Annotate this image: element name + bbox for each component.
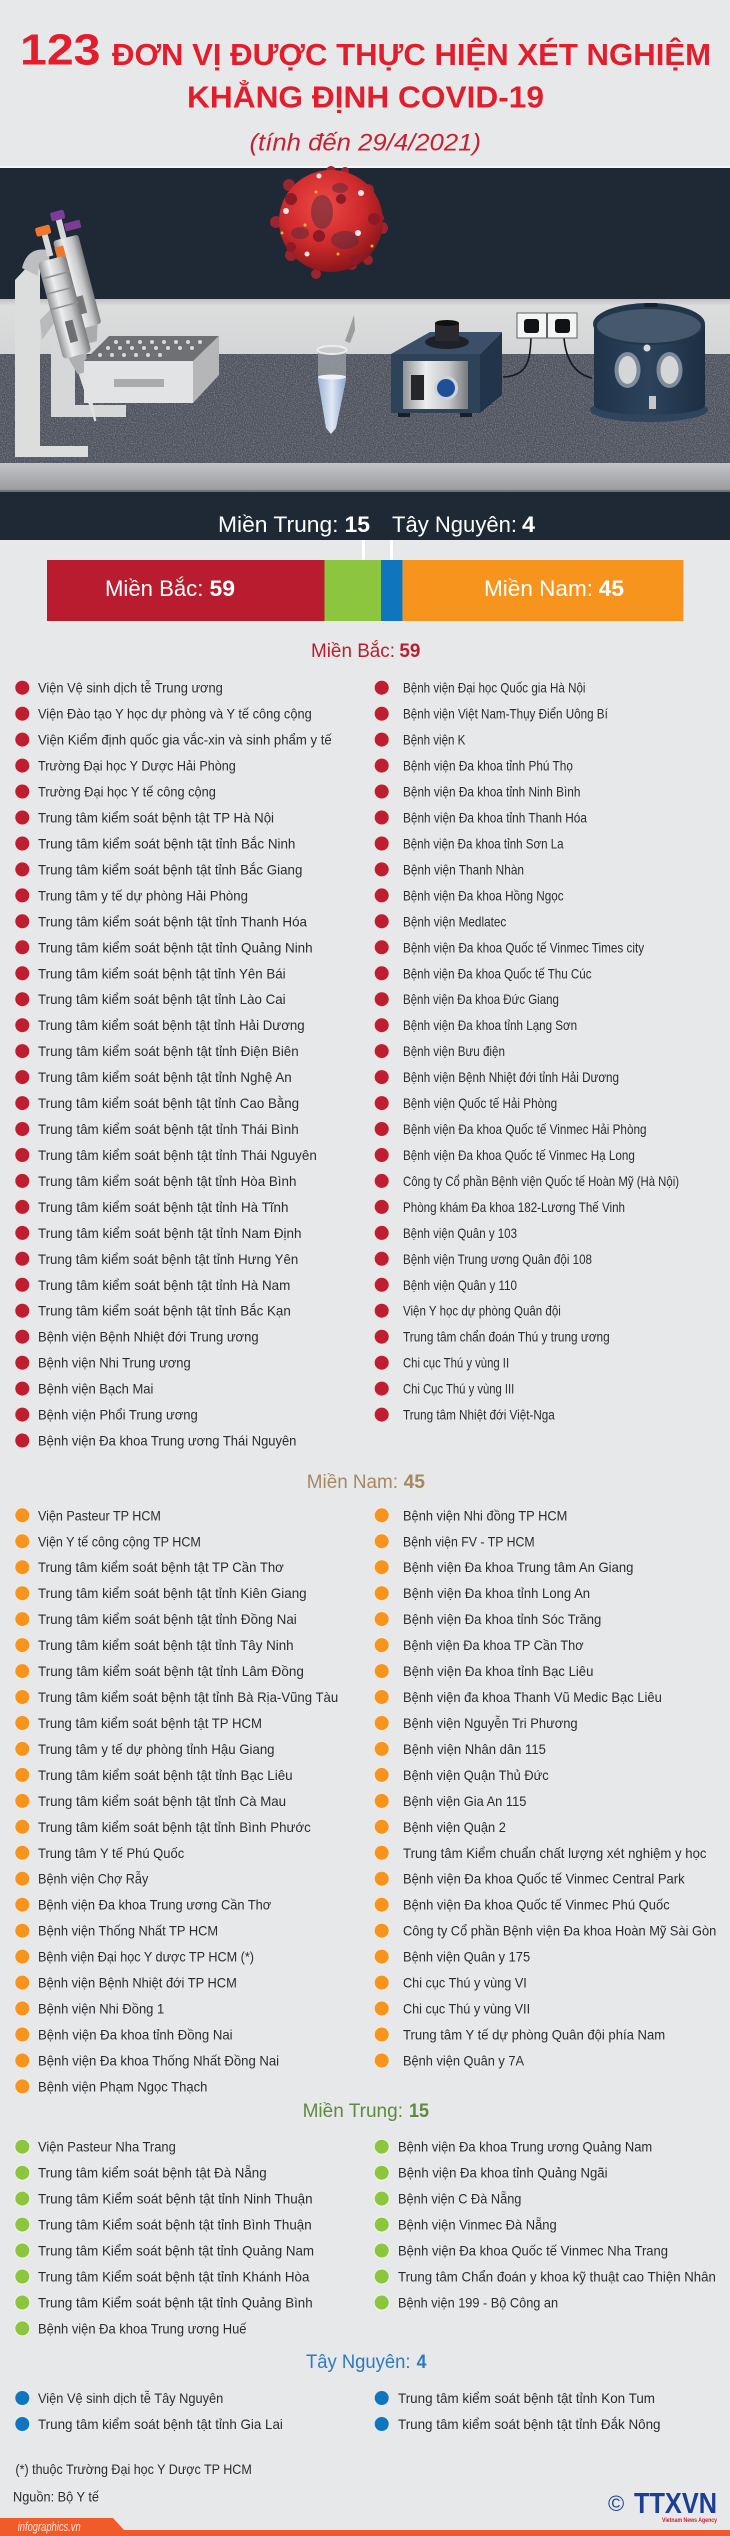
list: Miền Bắc left column: Bệnh viện Phổi Trung ương xyxy=(38,1407,198,1423)
icon: front pipette xyxy=(29,222,109,425)
logo: TTXVN: Vietnam News Agency xyxy=(662,2518,718,2524)
list: Miền Bắc left column: Trung tâm kiểm soát bệnh tật TP Hà Nội xyxy=(38,810,274,826)
list: Miền Trung left column: Trung tâm Kiểm soát bệnh tật tỉnh Quảng Nam xyxy=(38,2242,314,2258)
list: Miền Bắc left column: Trung tâm kiểm soát bệnh tật tỉnh Hưng Yên xyxy=(38,1251,298,1267)
list: Miền Nam right column: Bệnh viện Đa khoa tỉnh Bạc Liêu xyxy=(403,1663,593,1679)
list: Miền Bắc left column: Trung tâm kiểm soát bệnh tật tỉnh Yên Bái xyxy=(38,965,286,981)
list: Tây Nguyên left column: Viện Vệ sinh dịch tễ Tây Nguyên xyxy=(38,2390,223,2406)
heading: Miền Trung: Miền Trung: xyxy=(303,2101,403,2122)
label: central and highland counts: 15 xyxy=(344,512,370,537)
list: Miền Nam left column: Viện Pasteur TP HCM xyxy=(38,1507,161,1523)
list: Miền Nam right column: Bệnh viện Nhân dân 115 xyxy=(403,1741,546,1757)
list: Miền Nam left column: Bệnh viện Đa khoa Trung ương Cần Thơ xyxy=(38,1897,271,1913)
logo: TTXVN: TTXVN xyxy=(634,2488,717,2520)
list: Miền Nam left column xyxy=(15,1507,338,2094)
list: Miền Trung left column: Trung tâm Kiểm soát bệnh tật tỉnh Ninh Thuận xyxy=(38,2191,313,2207)
list: Miền Bắc right column: Bệnh viện Quân y 103 xyxy=(403,1225,517,1241)
list: Miền Bắc right column: Bệnh viện Đa khoa Quốc tế Vinmec Times city xyxy=(403,939,644,955)
list: Miền Nam right column xyxy=(374,1507,716,2068)
icon: vortex mixer xyxy=(391,320,502,417)
list: Miền Bắc left column xyxy=(15,680,332,1448)
list: Miền Bắc right column: Bệnh viện Bệnh Nhiệt đới tỉnh Hải Dương xyxy=(403,1069,619,1085)
list: Miền Nam right column: Chi cục Thú y vùng VI xyxy=(403,1975,527,1991)
list: Tây Nguyên right column: Trung tâm kiểm soát bệnh tật tỉnh Đắk Nông xyxy=(398,2416,660,2432)
source: Nguồn: Bộ Y tế xyxy=(13,2488,99,2504)
illustration: laboratory scene xyxy=(0,166,730,540)
footnote: (*) thuộc Trường Đại học Y Dược TP HCM xyxy=(15,2461,252,2477)
list: Miền Nam right column: Bệnh viện Đa khoa tỉnh Sóc Trăng xyxy=(403,1611,601,1627)
logo: TTXVN xyxy=(608,2488,718,2524)
list: Miền Bắc right column: Bệnh viện K xyxy=(403,732,466,748)
list: Miền Bắc left column: Trung tâm kiểm soát bệnh tật tỉnh Quảng Ninh xyxy=(38,939,313,955)
list: Miền Bắc left column: Trung tâm kiểm soát bệnh tật tỉnh Lào Cai xyxy=(38,991,286,1007)
list: Miền Bắc left column: Bệnh viện Bạch Mai xyxy=(38,1381,153,1397)
list: Miền Bắc right column: Bệnh viện Đa khoa tỉnh Phú Thọ xyxy=(403,758,573,774)
list: Miền Bắc right column: Bệnh viện Quân y 110 xyxy=(403,1277,517,1293)
label: central and highland counts: Miền Trung: xyxy=(218,512,338,537)
list: Miền Trung right column: Bệnh viện Đa khoa Quốc tế Vinmec Nha Trang xyxy=(398,2242,668,2258)
list: Miền Nam right column: Bệnh viện FV - TP HCM xyxy=(403,1533,535,1549)
list: Miền Bắc left column: Trung tâm y tế dự phòng Hải Phòng xyxy=(38,887,248,903)
footer bar: infographics.vn xyxy=(0,2518,730,2536)
list: Miền Nam right column: Bệnh viện Quận Thủ Đức xyxy=(403,1767,549,1783)
stacked bar chart: units by region: 59 xyxy=(210,576,235,601)
list: Miền Trung right column: Trung tâm Chẩn đoán y khoa kỹ thuật cao Thiện Nhân xyxy=(398,2268,716,2284)
list: Miền Nam left column: Trung tâm kiểm soát bệnh tật tỉnh Bạc Liêu xyxy=(38,1767,293,1783)
title: ĐƠN VỊ ĐƯỢC THỰC HIỆN XÉT NGHIỆM xyxy=(112,36,711,72)
list: Miền Bắc right column: Bệnh viện Quốc tế Hải Phòng xyxy=(403,1095,557,1111)
list: Miền Bắc left column: Trung tâm kiểm soát bệnh tật tỉnh Thái Bình xyxy=(38,1121,299,1137)
list: Miền Bắc left column: Bệnh viện Đa khoa Trung ương Thái Nguyên xyxy=(38,1432,296,1448)
list: Miền Nam right column: Bệnh viện Quận 2 xyxy=(403,1819,506,1835)
list: Miền Trung left column: Trung tâm kiểm soát bệnh tật Đà Nẵng xyxy=(38,2165,267,2181)
list: Miền Trung right column: Bệnh viện C Đà Nẵng xyxy=(398,2191,521,2207)
list: Miền Nam right column: Trung tâm Y tế dự phòng Quân đội phía Nam xyxy=(403,2026,665,2042)
list: Miền Bắc right column: Bệnh viện Đa khoa Quốc tế Vinmec Hải Phòng xyxy=(403,1121,646,1137)
list: Miền Bắc right column: Bệnh viện Thanh Nhàn xyxy=(403,861,524,877)
list: Miền Bắc right column: Bệnh viện Đa khoa Quốc tế Thu Cúc xyxy=(403,965,592,981)
list: Miền Nam left column: Trung tâm kiểm soát bệnh tật TP Cần Thơ xyxy=(38,1559,284,1575)
list: Miền Nam left column: Bệnh viện Chợ Rẫy xyxy=(38,1871,148,1887)
list: Miền Bắc right column: Bệnh viện Đại học Quốc gia Hà Nội xyxy=(403,680,586,696)
subtitle: date: (tính đến 29/4/2021) xyxy=(250,130,481,156)
list: Miền Trung right column: Bệnh viện Đa khoa Trung ương Quảng Nam xyxy=(398,2139,652,2155)
list: Miền Trung right column: Bệnh viện Vinmec Đà Nẵng xyxy=(398,2217,557,2233)
list: Miền Bắc left column: Trung tâm kiểm soát bệnh tật tỉnh Nam Định xyxy=(38,1225,302,1241)
list: Miền Bắc right column: Bệnh viện Đa khoa Đức Giang xyxy=(403,991,559,1007)
list: Miền Bắc left column: Viện Đào tạo Y học dự phòng và Y tế công cộng xyxy=(38,706,312,722)
list: Miền Trung left column: Trung tâm Kiểm soát bệnh tật tỉnh Bình Thuận xyxy=(38,2217,312,2233)
list: Miền Nam left column: Trung tâm kiểm soát bệnh tật TP HCM xyxy=(38,1715,262,1731)
logo: TTXVN: © xyxy=(608,2491,624,2516)
list: Miền Nam left column: Bệnh viện Đa khoa Thống Nhất Đồng Nai xyxy=(38,2052,279,2068)
connector ticks xyxy=(362,540,393,560)
list: Miền Nam left column: Bệnh viện Nhi Đồng 1 xyxy=(38,2000,164,2016)
list: Miền Nam left column: Trung tâm kiểm soát bệnh tật tỉnh Bình Phước xyxy=(38,1819,311,1835)
list: Miền Nam left column: Bệnh viện Bệnh Nhiệt đới TP HCM xyxy=(38,1975,237,1991)
list: Miền Bắc right column: Bệnh viện Medlatec xyxy=(403,913,506,929)
list: Miền Nam right column: Trung tâm Kiểm chuẩn chất lượng xét nghiệm y học xyxy=(403,1845,706,1861)
icon: back pipette xyxy=(46,206,125,402)
list: Miền Nam right column: Bệnh viện Nguyễn Tri Phương xyxy=(403,1715,578,1731)
icon: centrifuge xyxy=(590,303,708,422)
list: Miền Trung left column xyxy=(15,2139,314,2336)
list: Miền Trung left column: Viện Pasteur Nha Trang xyxy=(38,2139,176,2155)
footer bar: infographics.vn: infographics.vn xyxy=(18,2519,81,2534)
list: Miền Bắc left column: Trung tâm kiểm soát bệnh tật tỉnh Hà Tĩnh xyxy=(38,1199,288,1215)
title: KHẲNG ĐỊNH COVID-19 xyxy=(187,80,544,114)
list: Miền Bắc right column: Trung tâm chẩn đoán Thú y trung ương xyxy=(403,1329,610,1345)
label: central and highland counts xyxy=(218,512,536,537)
list: Miền Nam left column: Bệnh viện Thống Nhất TP HCM xyxy=(38,1923,218,1939)
list: Miền Nam right column: Bệnh viện Nhi đồng TP HCM xyxy=(403,1507,567,1523)
heading: Tây Nguyên: Tây Nguyên: xyxy=(306,2352,410,2373)
list: Miền Nam left column: Bệnh viện Đa khoa tỉnh Đồng Nai xyxy=(38,2026,233,2042)
label: central and highland counts: 4 xyxy=(522,512,536,537)
list: Miền Nam left column: Trung tâm y tế dự phòng tỉnh Hậu Giang xyxy=(38,1741,274,1757)
icon: test tube xyxy=(318,315,355,434)
label: central and highland counts: Tây Nguyên: xyxy=(392,512,517,537)
list: Miền Bắc right column xyxy=(374,680,679,1423)
heading: Miền Bắc: Miền Bắc: xyxy=(311,640,395,662)
heading: Miền Nam: 45 xyxy=(404,1472,425,1493)
icon: tip tray box xyxy=(84,336,219,403)
heading: Miền Trung: 15 xyxy=(409,2101,429,2122)
list: Miền Nam left column: Trung tâm kiểm soát bệnh tật tỉnh Tây Ninh xyxy=(38,1637,294,1653)
heading: Miền Nam: Miền Nam: xyxy=(307,1472,398,1493)
list: Miền Bắc left column: Bệnh viện Nhi Trung ương xyxy=(38,1355,191,1371)
list: Miền Bắc right column: Phòng khám Đa khoa 182-Lương Thế Vinh xyxy=(403,1199,625,1215)
list: Miền Nam right column: Bệnh viện Đa khoa Trung tâm An Giang xyxy=(403,1559,633,1575)
list: Miền Bắc left column: Viện Kiểm định quốc gia vắc-xin và sinh phẩm y tế xyxy=(38,732,332,748)
list: Miền Bắc right column: Bệnh viện Đa khoa tỉnh Ninh Bình xyxy=(403,784,580,800)
list: Miền Trung left column: Trung tâm Kiểm soát bệnh tật tỉnh Khánh Hòa xyxy=(38,2268,310,2284)
list: Tây Nguyên right column xyxy=(374,2390,660,2432)
list: Miền Nam left column: Viện Y tế công cộng TP HCM xyxy=(38,1533,201,1549)
list: Miền Trung left column: Trung tâm Kiểm soát bệnh tật tỉnh Quảng Bình xyxy=(38,2294,313,2310)
list: Tây Nguyên left column: Trung tâm kiểm soát bệnh tật tỉnh Gia Lai xyxy=(38,2416,283,2432)
list: Miền Nam right column: Bệnh viện Đa khoa TP Cần Thơ xyxy=(403,1637,584,1653)
list: Miền Bắc left column: Trung tâm kiểm soát bệnh tật tỉnh Điện Biên xyxy=(38,1043,299,1059)
list: Miền Bắc left column: Trung tâm kiểm soát bệnh tật tỉnh Hải Dương xyxy=(38,1017,305,1033)
list: Miền Nam right column: Chi cục Thú y vùng VII xyxy=(403,2000,530,2016)
list: Tây Nguyên left column xyxy=(15,2390,283,2432)
stacked bar chart: units by region: Miền Nam: xyxy=(484,576,593,601)
list: Miền Trung left column: Bệnh viện Đa khoa Trung ương Huế xyxy=(38,2320,247,2336)
icon: coronavirus xyxy=(270,166,388,279)
list: Miền Bắc right column: Bệnh viện Đa khoa tỉnh Lạng Sơn xyxy=(403,1017,577,1033)
list: Miền Nam right column: Bệnh viện Đa khoa Quốc tế Vinmec Central Park xyxy=(403,1871,686,1887)
stacked bar chart: units by region xyxy=(47,560,683,621)
list: Miền Trung right column: Bệnh viện Đa khoa tỉnh Quảng Ngãi xyxy=(398,2165,608,2181)
list: Miền Nam left column: Bệnh viện Đại học Y dược TP HCM (*) xyxy=(38,1949,254,1965)
list: Miền Bắc right column: Chi cục Thú y vùng II xyxy=(403,1355,509,1371)
list: Miền Nam right column: Bệnh viện đa khoa Thanh Vũ Medic Bạc Liêu xyxy=(403,1689,662,1705)
list: Miền Nam left column: Trung tâm kiểm soát bệnh tật tỉnh Bà Rịa-Vũng Tàu xyxy=(38,1689,338,1705)
list: Miền Trung right column xyxy=(374,2139,716,2310)
list: Miền Trung right column: Bệnh viện 199 - Bộ Công an xyxy=(398,2294,558,2310)
list: Miền Bắc left column: Bệnh viện Bệnh Nhiệt đới Trung ương xyxy=(38,1329,259,1345)
list: Miền Nam right column: Bệnh viện Quân y 7A xyxy=(403,2052,525,2068)
list: Miền Nam left column: Trung tâm kiểm soát bệnh tật tỉnh Lâm Đồng xyxy=(38,1663,304,1679)
list: Miền Bắc right column: Bệnh viện Đa khoa tỉnh Thanh Hóa xyxy=(403,810,587,826)
list: Miền Bắc right column: Bệnh viện Đa khoa Quốc tế Vinmec Hạ Long xyxy=(403,1147,635,1163)
list: Miền Bắc left column: Viện Vệ sinh dịch tễ Trung ương xyxy=(38,680,223,696)
list: Miền Bắc left column: Trường Đại học Y Dược Hải Phòng xyxy=(38,758,236,774)
list: Miền Bắc left column: Trung tâm kiểm soát bệnh tật tỉnh Hà Nam xyxy=(38,1277,290,1293)
icon: wall sockets and cables xyxy=(503,313,592,378)
list: Miền Bắc left column: Trung tâm kiểm soát bệnh tật tỉnh Nghệ An xyxy=(38,1069,292,1085)
list: Tây Nguyên right column: Trung tâm kiểm soát bệnh tật tỉnh Kon Tum xyxy=(398,2390,655,2406)
list: Miền Bắc right column: Bệnh viện Đa khoa Hồng Ngọc xyxy=(403,887,564,903)
heading: Miền Bắc: 59 xyxy=(399,641,420,662)
list: Miền Nam left column: Trung tâm kiểm soát bệnh tật tỉnh Kiên Giang xyxy=(38,1585,307,1601)
list: Miền Bắc right column: Chi Cục Thú y vùng III xyxy=(403,1381,514,1397)
title xyxy=(20,26,711,114)
list: Miền Bắc left column: Trung tâm kiểm soát bệnh tật tỉnh Thanh Hóa xyxy=(38,913,307,929)
list: Miền Nam left column: Trung tâm Y tế Phú Quốc xyxy=(38,1845,184,1861)
list: Miền Nam right column: Bệnh viện Quân y 175 xyxy=(403,1949,530,1965)
list: Miền Nam right column: Bệnh viện Đa khoa Quốc tế Vinmec Phú Quốc xyxy=(403,1897,670,1913)
list: Miền Bắc right column: Bệnh viện Đa khoa tỉnh Sơn La xyxy=(403,836,564,852)
list: Miền Bắc right column: Bệnh viện Trung ương Quân đội 108 xyxy=(403,1251,592,1267)
list: Miền Bắc left column: Trung tâm kiểm soát bệnh tật tỉnh Cao Bằng xyxy=(38,1095,299,1111)
list: Miền Bắc right column: Bệnh viện Việt Nam-Thụy Điển Uông Bí xyxy=(403,706,608,722)
list: Miền Nam right column: Bệnh viện Đa khoa tỉnh Long An xyxy=(403,1585,590,1601)
list: Miền Nam right column: Bệnh viện Gia An 115 xyxy=(403,1793,527,1809)
list: Miền Bắc left column: Trung tâm kiểm soát bệnh tật tỉnh Bắc Ninh xyxy=(38,836,295,852)
list: Miền Bắc right column: Trung tâm Nhiệt đới Việt-Nga xyxy=(403,1407,555,1423)
list: Miền Nam left column: Trung tâm kiểm soát bệnh tật tỉnh Cà Mau xyxy=(38,1793,286,1809)
stacked bar chart: units by region: 45 xyxy=(599,576,624,601)
list: Miền Bắc left column: Trung tâm kiểm soát bệnh tật tỉnh Thái Nguyên xyxy=(38,1147,317,1163)
list: Miền Bắc right column: Bệnh viện Bưu điện xyxy=(403,1043,505,1059)
stacked bar chart: units by region: Miền Bắc: xyxy=(105,576,203,601)
list: Miền Nam left column: Bệnh viện Phạm Ngọc Thạch xyxy=(38,2078,207,2094)
title: 123 xyxy=(20,26,100,74)
list: Miền Bắc left column: Trung tâm kiểm soát bệnh tật tỉnh Hòa Bình xyxy=(38,1173,296,1189)
list: Miền Bắc left column: Trung tâm kiểm soát bệnh tật tỉnh Bắc Giang xyxy=(38,861,302,877)
list: Miền Bắc right column: Viện Y học dự phòng Quân đội xyxy=(403,1303,561,1319)
list: Miền Nam left column: Trung tâm kiểm soát bệnh tật tỉnh Đồng Nai xyxy=(38,1611,297,1627)
list: Miền Bắc left column: Trung tâm kiểm soát bệnh tật tỉnh Bắc Kạn xyxy=(38,1303,291,1319)
icon: pipette stand xyxy=(15,250,126,457)
list: Miền Bắc left column: Trường Đại học Y tế công cộng xyxy=(38,784,216,800)
heading: Tây Nguyên: 4 xyxy=(417,2352,427,2373)
